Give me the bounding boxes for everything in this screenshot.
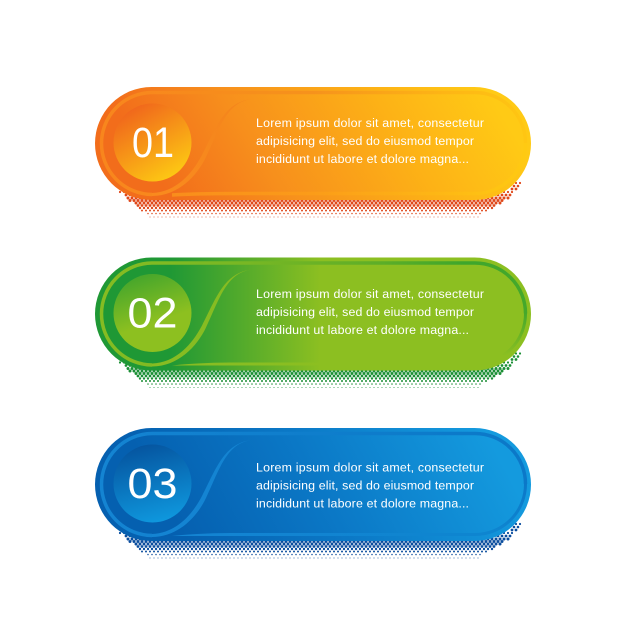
text block 02: incididunt ut labore et dolore magna... [256,323,469,337]
text block 01: incididunt ut labore et dolore magna... [256,152,469,166]
number circle 02 [114,274,192,352]
number circle 01: 01 [132,119,174,167]
swoosh 02 [152,270,252,366]
text block 01: Lorem ipsum dolor sit amet, consectetur [256,116,484,130]
text block 03: adipisicing elit, sed do eiusmod tempor [256,478,474,492]
number circle 01 [114,104,192,182]
bottom band 02 [172,362,330,366]
inner ring lower right 02 [475,314,526,364]
bottom band 03 [172,533,475,536]
swoosh 01 [152,99,252,196]
number circle 03: 03 [128,460,178,508]
pill body 03 [95,428,531,541]
text block 02: Lorem ipsum dolor sit amet, consectetur [256,287,484,301]
number circle 03 [114,444,192,522]
halftone shadow 02 [120,354,523,388]
inner ring lower right 01 [172,143,526,195]
number circle 02: 02 [128,290,178,338]
inner ring top and left 02 [101,263,525,365]
text block 02 [256,287,484,337]
halftone shadow 01 [120,183,523,217]
text block 01: adipisicing elit, sed do eiusmod tempor [256,134,474,148]
panel: step 03 blue [95,428,531,558]
halftone shadow 03 [120,524,523,558]
text block 03: incididunt ut labore et dolore magna... [256,496,469,510]
inner ring top and left 01 [101,92,525,194]
inner ring lower right 03 [475,484,526,534]
text block 02: adipisicing elit, sed do eiusmod tempor [256,305,474,319]
pill body 01 [95,87,531,200]
panel: step 02 green [95,258,531,388]
text block 03 [256,460,484,510]
panel: step 01 orange [95,87,531,217]
inner ring top and left 03 [101,434,525,536]
pill body 02 [95,258,531,370]
text block 03: Lorem ipsum dolor sit amet, consectetur [256,460,484,474]
text block 01 [256,116,484,166]
swoosh 03 [152,440,252,537]
